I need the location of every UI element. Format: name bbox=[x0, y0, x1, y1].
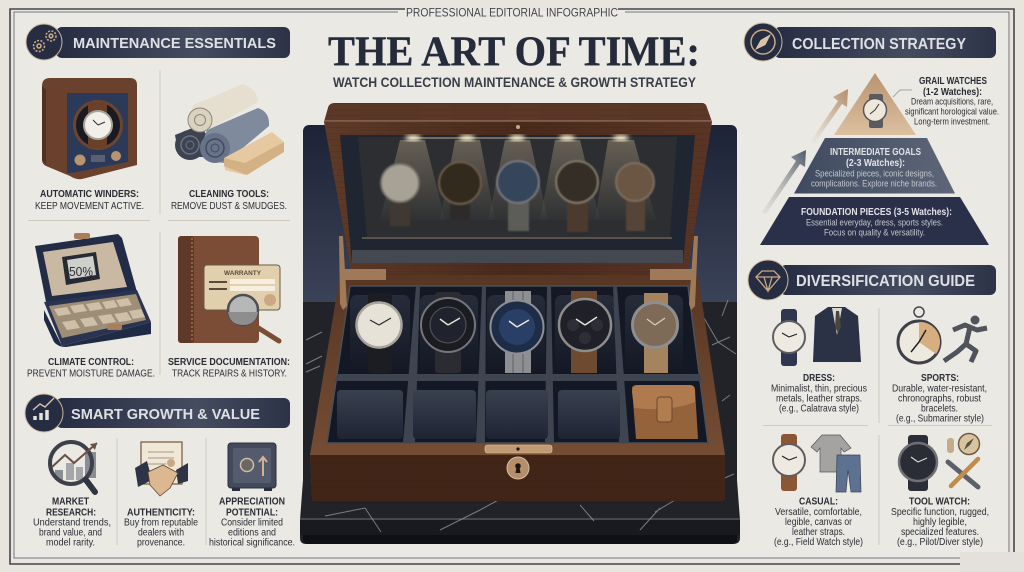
leather travel pouch bbox=[632, 385, 698, 439]
icon: service documents: WARRANTY bbox=[224, 270, 262, 277]
text: sports: chronographs, robust bbox=[898, 394, 981, 404]
tier: intermediate goals bbox=[794, 138, 955, 194]
heading: diversification guide: DIVERSIFICATION GUIDE bbox=[796, 273, 975, 290]
eyebrow label: PROFESSIONAL EDITORIAL INFOGRAPHIC bbox=[406, 6, 618, 20]
text: grail watches: GRAIL WATCHES bbox=[919, 75, 987, 87]
watch: black diver bbox=[421, 292, 475, 373]
text: service documentation: SERVICE DOCUMENTATION: bbox=[168, 356, 290, 368]
text: authenticity: dealers with bbox=[138, 528, 184, 538]
icon: automatic winder bbox=[42, 78, 137, 179]
brass hinges bbox=[339, 236, 698, 310]
watch: white dress bbox=[356, 293, 402, 373]
text: market research bbox=[33, 496, 111, 548]
text: appreciation potential bbox=[209, 496, 295, 548]
text: grail watches: Dream acquisitions, rare, bbox=[911, 96, 993, 108]
tray dividers bbox=[334, 286, 702, 443]
icon: stopwatch and runner bbox=[898, 307, 987, 363]
text: automatic winders: AUTOMATIC WINDERS: bbox=[40, 188, 139, 200]
brass nameplate bbox=[485, 445, 552, 453]
reflected watches in lid bbox=[381, 161, 654, 232]
heading: collection strategy: COLLECTION STRATEGY bbox=[792, 36, 967, 53]
text: cleaning tools: REMOVE DUST & SMUDGES. bbox=[171, 200, 287, 212]
icon: climate control case bbox=[35, 233, 151, 347]
text: casual: (e.g., Field Watch style) bbox=[774, 537, 863, 548]
watch: tan field bbox=[632, 293, 678, 373]
heading: maintenance essentials: MAINTENANCE ESSENTIALS bbox=[73, 35, 276, 52]
text: climate control: CLIMATE CONTROL: bbox=[48, 356, 134, 368]
heading: smart growth and value bbox=[25, 394, 290, 432]
text: market research: Understand trends, bbox=[33, 518, 111, 528]
text: service documentation bbox=[168, 356, 290, 380]
text: tool watch: (e.g., Pilot/Diver style) bbox=[897, 537, 983, 548]
text: foundation pieces bbox=[801, 206, 952, 238]
text: foundation pieces: Essential everyday, dress, sports styles. bbox=[806, 218, 943, 228]
text: appreciation potential: editions and bbox=[228, 528, 276, 538]
icon: appreciation safe bbox=[228, 443, 276, 491]
text: tool watch: specialized features. bbox=[901, 527, 979, 538]
heading: maintenance essentials bbox=[26, 24, 290, 60]
watch: brown strap chronograph bbox=[559, 291, 611, 373]
text: authenticity bbox=[124, 508, 198, 548]
title: THE ART OF TIME: bbox=[328, 30, 700, 76]
display lights bbox=[380, 135, 656, 220]
icon: grail watch bbox=[864, 94, 886, 128]
text: sports bbox=[892, 372, 987, 424]
icon: market research bbox=[50, 442, 97, 492]
text: intermediate goals bbox=[811, 146, 937, 190]
brass keyhole lock bbox=[507, 457, 529, 479]
backdrop panel bbox=[303, 125, 737, 315]
panel: collection strategy bbox=[744, 23, 999, 245]
text: intermediate goals: complications. Explore niche brands. bbox=[811, 178, 937, 190]
text: grail watches: significant horological value. bbox=[905, 106, 999, 118]
text: market research: RESEARCH: bbox=[46, 508, 96, 518]
subtitle: WATCH COLLECTION MAINTENANCE & GROWTH STRATEGY bbox=[333, 74, 697, 90]
text: dress: DRESS: bbox=[803, 372, 835, 384]
icon: climate control case: 50% bbox=[69, 264, 93, 279]
text: intermediate goals: Specialized pieces, iconic designs, bbox=[815, 168, 934, 180]
text: casual bbox=[774, 496, 863, 548]
text: grail watches: Long-term investment. bbox=[914, 116, 990, 128]
icon: service documents bbox=[178, 236, 280, 343]
central illustration: watch box bbox=[300, 103, 740, 544]
text: climate control bbox=[27, 356, 155, 380]
text: casual: CASUAL: bbox=[799, 496, 838, 508]
panel: diversification guide bbox=[748, 260, 996, 548]
text: cleaning tools: CLEANING TOOLS: bbox=[189, 188, 269, 200]
upper cushions bbox=[350, 295, 683, 373]
text: tool watch bbox=[891, 496, 989, 548]
growth arrow: upper bbox=[810, 89, 848, 144]
text: appreciation potential: APPRECIATION bbox=[219, 496, 285, 508]
text: authenticity: Buy from reputable bbox=[124, 518, 198, 528]
text: sports: Durable, water-resistant, bbox=[892, 384, 987, 394]
text: grail watches bbox=[905, 75, 999, 128]
text: sports: SPORTS: bbox=[921, 372, 959, 384]
text: tool watch: highly legible, bbox=[913, 517, 967, 528]
icon: casual watch and clothes bbox=[773, 434, 861, 492]
heading: collection strategy bbox=[744, 23, 996, 61]
text: dress: (e.g., Calatrava style) bbox=[779, 404, 859, 414]
heading: smart growth and value: SMART GROWTH & VALUE bbox=[71, 406, 260, 423]
text: market research: MARKET bbox=[52, 496, 89, 508]
heading: diversification guide bbox=[748, 260, 996, 300]
icon: cleaning cloths bbox=[175, 84, 284, 175]
text: foundation pieces: Focus on quality & versatility. bbox=[824, 228, 925, 238]
growth arrow: lower bbox=[762, 150, 806, 214]
icon: tool watch and tools bbox=[899, 434, 980, 491]
panel: smart growth and value bbox=[25, 394, 295, 548]
text: tool watch: TOOL WATCH: bbox=[909, 496, 970, 508]
text: intermediate goals: INTERMEDIATE GOALS bbox=[830, 146, 921, 158]
marble surface bbox=[300, 300, 740, 544]
text: tool watch: Specific function, rugged, bbox=[891, 507, 989, 518]
text: appreciation potential: Consider limited bbox=[221, 518, 283, 528]
text: market research: brand value, and bbox=[39, 528, 102, 538]
icon: authenticity handshake bbox=[135, 442, 188, 496]
text: sports: bracelets. bbox=[921, 404, 958, 414]
text: foundation pieces: FOUNDATION PIECES (3-5 Watches): bbox=[801, 206, 952, 218]
open lid bbox=[324, 103, 712, 275]
text: authenticity: AUTHENTICITY: bbox=[127, 508, 195, 518]
text: sports: (e.g., Submariner style) bbox=[896, 414, 984, 424]
text: market research: model rarity. bbox=[46, 538, 95, 548]
tier: grail watches bbox=[834, 73, 916, 135]
text: cleaning tools bbox=[171, 188, 287, 212]
pyramid chart bbox=[760, 73, 999, 245]
text: authenticity: provenance. bbox=[137, 538, 185, 548]
text: dress bbox=[771, 372, 867, 414]
text: intermediate goals: (2-3 Watches): bbox=[846, 157, 905, 169]
text: service documentation: TRACK REPAIRS & HISTORY. bbox=[172, 368, 287, 380]
text: grail watches: (1-2 Watches): bbox=[923, 86, 982, 98]
panel: maintenance essentials bbox=[26, 24, 290, 380]
tier: foundation pieces bbox=[760, 197, 989, 245]
text: automatic winders bbox=[35, 188, 144, 212]
icon: dress watch and suit bbox=[773, 307, 861, 366]
text: casual: leather straps. bbox=[792, 527, 845, 538]
watch: blue steel diver bbox=[490, 291, 544, 373]
text: automatic winders: KEEP MOVEMENT ACTIVE. bbox=[35, 200, 144, 212]
text: dress: Minimalist, thin, precious bbox=[771, 384, 867, 394]
lower cushions bbox=[337, 390, 620, 439]
text: dress: metals, leather straps. bbox=[776, 394, 862, 404]
text: appreciation potential: historical significance. bbox=[209, 538, 295, 548]
tray body bbox=[310, 275, 725, 501]
text: casual: legible, canvas or bbox=[785, 517, 853, 528]
text: climate control: PREVENT MOISTURE DAMAGE. bbox=[27, 368, 155, 380]
text: casual: Versatile, comfortable, bbox=[775, 507, 862, 518]
text: appreciation potential: POTENTIAL: bbox=[226, 508, 278, 518]
